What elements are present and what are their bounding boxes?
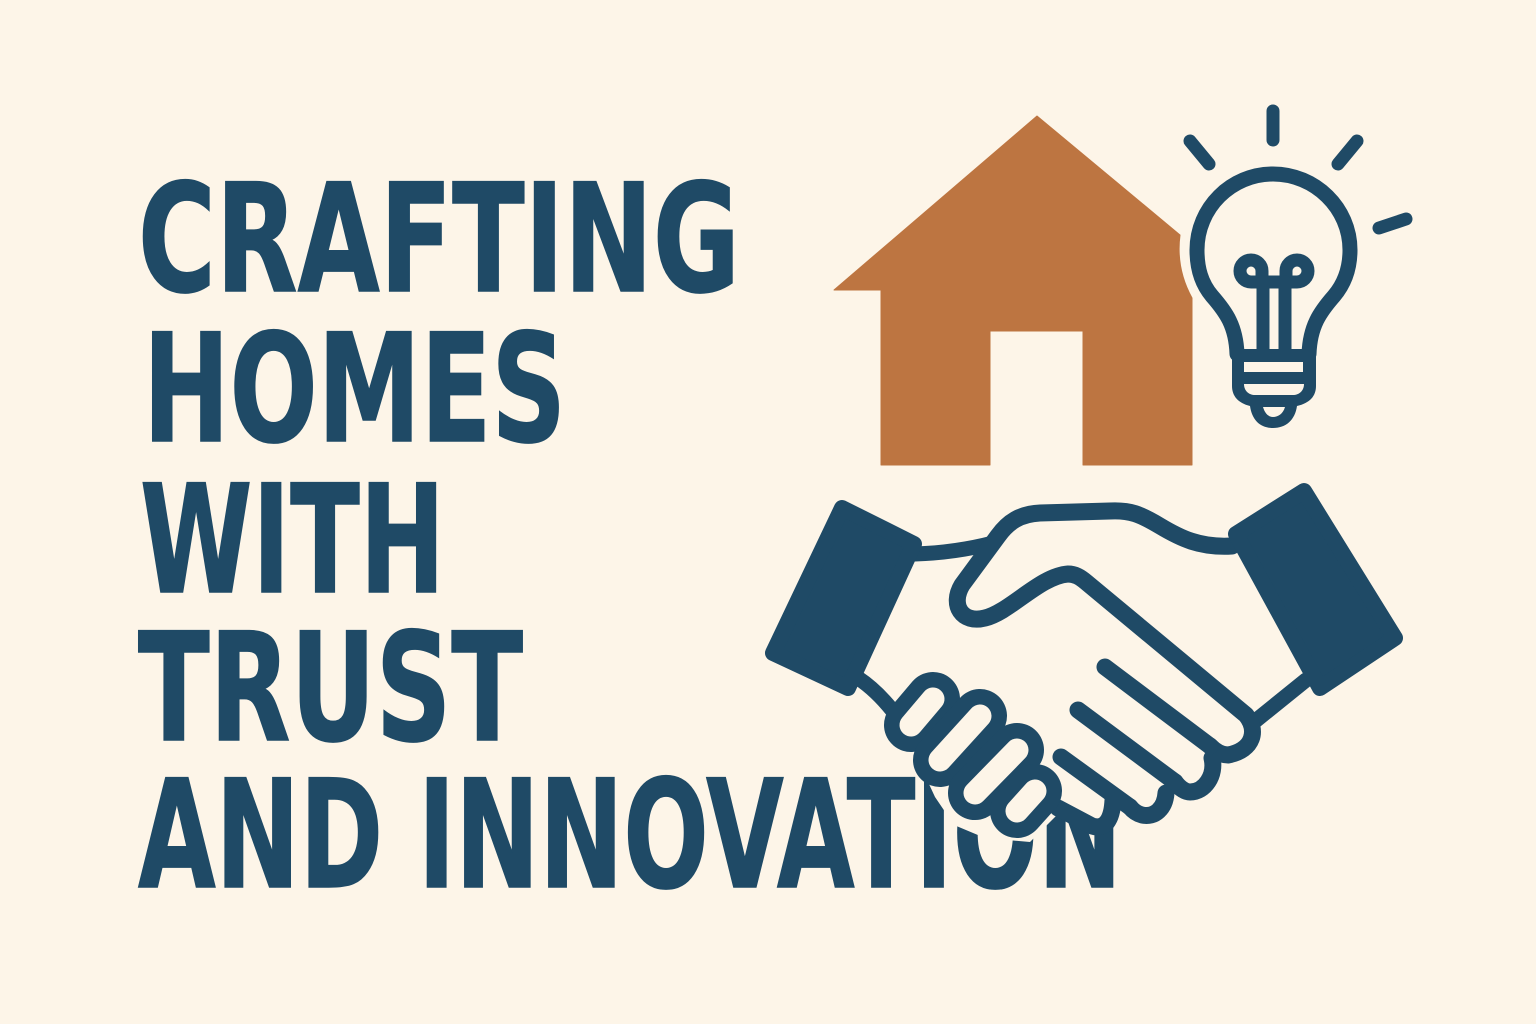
title: [138, 153, 1122, 923]
light rays: [1190, 111, 1406, 228]
right cuff: [1236, 491, 1395, 688]
clenched fingers outer: [911, 699, 1035, 811]
clenched fingers inner: [911, 699, 1035, 811]
icon: house: [834, 116, 1192, 465]
bulb glass outline: [1197, 174, 1350, 354]
icon: light bulb: [1190, 111, 1406, 228]
clasping hand outline: [957, 511, 1252, 816]
cream hand mask over text: [890, 530, 1255, 842]
left cuff: [773, 508, 914, 688]
left arm lines: [858, 543, 993, 710]
filament stems: [1263, 282, 1285, 352]
filament: [1240, 260, 1308, 352]
fingers of right hand: [1058, 667, 1210, 827]
title: CRAFTING: [138, 153, 740, 327]
filament loops: [1240, 260, 1308, 282]
title: TRUST: [138, 602, 523, 776]
title: HOMES: [143, 303, 566, 477]
bulb base: [1232, 349, 1316, 428]
title: WITH: [140, 454, 445, 628]
icon: handshake: [773, 491, 1395, 842]
right arm lower line: [1254, 680, 1306, 722]
